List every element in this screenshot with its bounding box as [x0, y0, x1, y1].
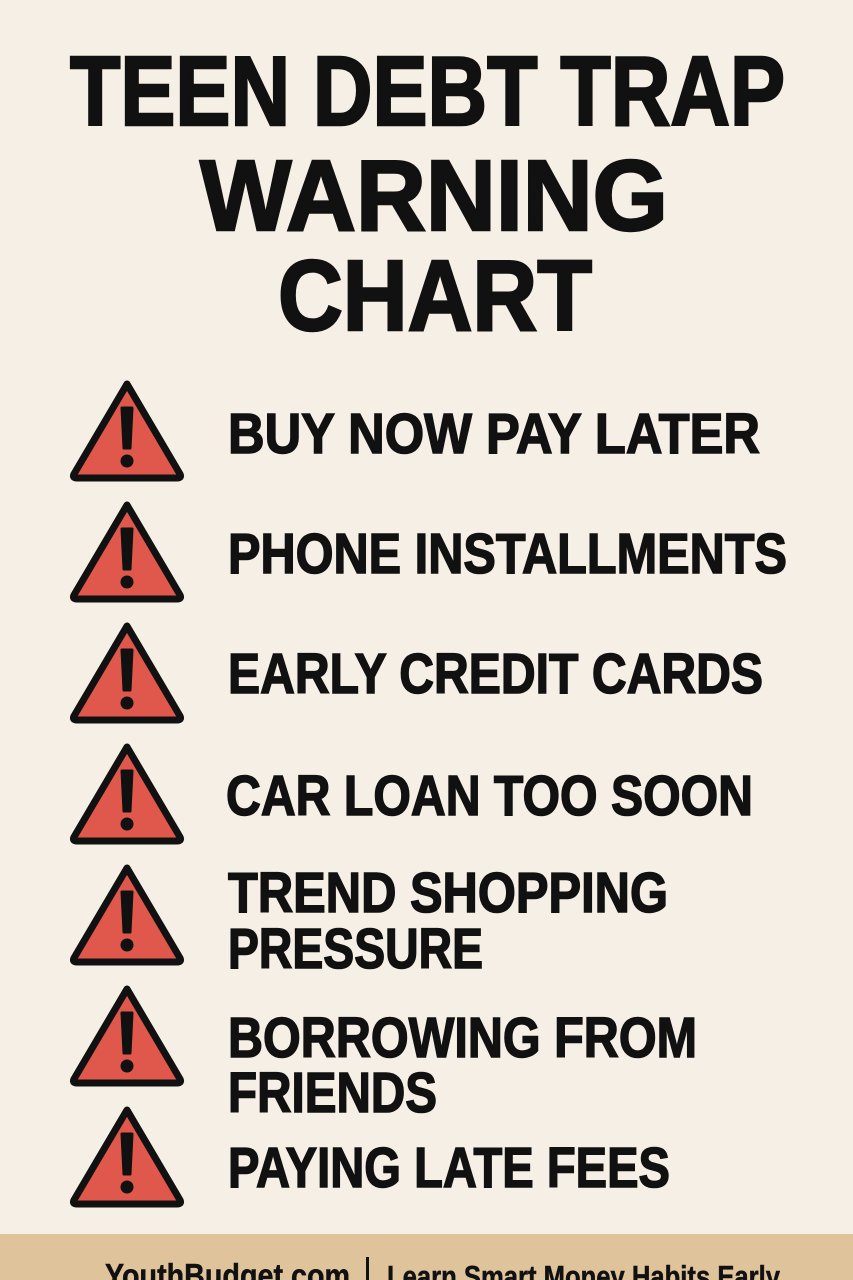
item: buy now pay later — [73, 384, 760, 478]
item: paying late fees — [73, 1110, 670, 1204]
icon: warning triangle — [73, 1110, 181, 1204]
item: car loan too soon — [73, 747, 753, 841]
item: trend shopping pressure — [73, 861, 668, 981]
item: trend shopping pressure: PRESSURE — [228, 917, 483, 981]
item: buy now pay later: BUY NOW PAY LATER — [228, 402, 760, 466]
item: car loan too soon: CAR LOAN TOO SOON — [226, 764, 753, 828]
icon: warning triangle — [73, 384, 181, 478]
title: CHART — [278, 240, 592, 352]
item: paying late fees: PAYING LATE FEES — [228, 1136, 670, 1200]
footer — [0, 1234, 853, 1280]
item: borrowing from friends: FRIENDS — [228, 1061, 437, 1125]
icon: warning triangle — [73, 989, 181, 1083]
icon: warning triangle — [73, 868, 181, 962]
title — [70, 36, 785, 352]
icon: warning triangle — [73, 626, 181, 720]
icon: warning triangle — [73, 505, 181, 599]
item: borrowing from friends — [73, 989, 697, 1125]
icon: warning triangle — [73, 747, 181, 841]
item: early credit cards — [73, 626, 763, 720]
item: early credit cards: EARLY CREDIT CARDS — [228, 642, 763, 706]
item: trend shopping pressure: TREND SHOPPING — [228, 861, 668, 925]
item: borrowing from friends: BORROWING FROM — [228, 1006, 697, 1070]
item: phone installments — [73, 505, 787, 599]
title: WARNING — [200, 140, 668, 252]
